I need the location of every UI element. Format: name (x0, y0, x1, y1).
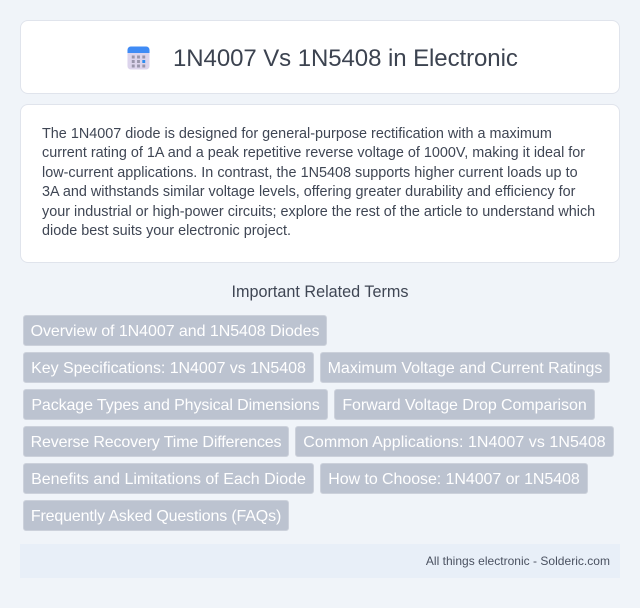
tag: Reverse Recovery Time Differences (31, 434, 281, 451)
tag (320, 463, 588, 494)
title: 1N4007 Vs 1N5408 in Electronic (173, 45, 518, 72)
tag: Forward Voltage Drop Comparison (342, 397, 587, 414)
footer bar (20, 544, 620, 578)
header panel (20, 20, 620, 94)
tag: Overview of 1N4007 and 1N5408 Diodes (31, 323, 319, 340)
footer credit: All things electronic - Solderic.com (426, 554, 610, 568)
intro paragraph: low-current applications. In contrast, the 1N5408 supports higher current loads up to (42, 165, 578, 181)
icon: calendar (127, 46, 150, 70)
tag: Key Specifications: 1N4007 vs 1N5408 (31, 360, 306, 377)
tag (23, 463, 314, 494)
tag (23, 500, 289, 531)
intro paragraph: 3A and withstands similar voltage levels, offering greater durability and efficiency for (42, 184, 575, 200)
tag (23, 389, 328, 420)
intro paragraph (42, 126, 595, 239)
tag (23, 315, 327, 346)
tag (23, 426, 289, 457)
intro text panel (20, 104, 620, 263)
tag (295, 426, 614, 457)
section heading: Important Related Terms (232, 283, 408, 301)
intro paragraph: diode best suits your electronic project. (42, 223, 291, 239)
related terms tag list (23, 315, 614, 531)
intro paragraph: The 1N4007 diode is designed for general-purpose rectification with a maximum (42, 126, 552, 142)
tag (334, 389, 595, 420)
tag: Frequently Asked Questions (FAQs) (31, 508, 281, 525)
tag: Benefits and Limitations of Each Diode (31, 471, 306, 488)
tag: How to Choose: 1N4007 or 1N5408 (328, 471, 580, 488)
tag: Common Applications: 1N4007 vs 1N5408 (303, 434, 606, 451)
tag: Maximum Voltage and Current Ratings (328, 360, 602, 377)
tag: Package Types and Physical Dimensions (31, 397, 320, 414)
tag (23, 352, 314, 383)
tag (320, 352, 610, 383)
intro paragraph: your industrial or high-power circuits; explore the rest of the article to understand which (42, 204, 595, 220)
intro paragraph: current rating of 1A and a peak repetitive reverse voltage of 1000V, making it ideal for (42, 145, 585, 161)
